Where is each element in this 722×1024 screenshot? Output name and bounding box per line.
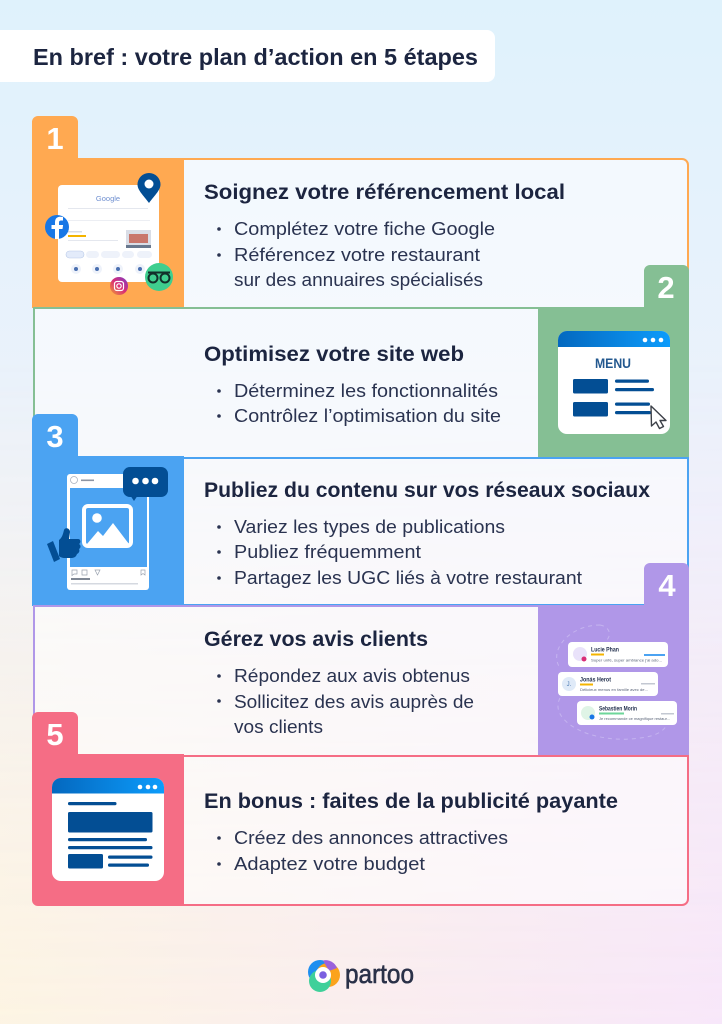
review: Jonas Herot: Délicieux menus en famille avec de... xyxy=(580,687,648,692)
bullet list 5: Créez des annonces attractives xyxy=(234,827,508,848)
heading 5: En bonus : faites de la publicité payante xyxy=(204,790,618,813)
bullet list 4: Sollicitez des avis auprès de xyxy=(234,691,474,712)
review: Sebastien Morin xyxy=(577,701,677,725)
icon: social post with like and comment xyxy=(47,467,168,590)
review: Sebastien Morin: Je recommande ce magnifique restaur... xyxy=(599,716,670,721)
icon: Google business listing with social badges: Google xyxy=(96,194,120,203)
title banner: En bref : votre plan d’action en 5 étapes xyxy=(33,44,478,70)
number 4: 4 xyxy=(658,568,676,603)
panel: step 3 social networks xyxy=(32,414,688,606)
number 2: 2 xyxy=(657,270,675,305)
icon: advertising browser window xyxy=(52,778,164,881)
bullet list 1 xyxy=(217,218,495,290)
logo mark xyxy=(308,960,340,992)
icon: menu browser window with cursor: MENU xyxy=(595,356,631,371)
tab and colour block 2 xyxy=(538,265,689,458)
bullet list 3 xyxy=(217,516,582,588)
icon: menu browser window with cursor xyxy=(558,331,670,434)
tab and colour block 4 xyxy=(538,563,689,756)
bullet list 5 xyxy=(217,827,508,874)
bullet list 4: vos clients xyxy=(234,716,323,737)
card 4 background xyxy=(34,606,542,756)
heading 4: Gérez vos avis clients xyxy=(204,628,428,651)
bullet list 3: Variez les types de publications xyxy=(234,516,505,537)
number 3: 3 xyxy=(46,419,64,454)
bullet list 4: Répondez aux avis obtenus xyxy=(234,665,470,686)
icon: Google business listing with social badges xyxy=(45,173,173,295)
card 3 background xyxy=(180,458,688,605)
number 5: 5 xyxy=(46,717,64,752)
card 5 background xyxy=(180,756,688,905)
review: Lucie Phan xyxy=(568,642,668,667)
bullet list 3: Partagez les UGC liés à votre restaurant xyxy=(234,567,582,588)
bullet list 2 xyxy=(217,380,501,426)
panel: step 2 website xyxy=(34,265,689,458)
bullet list 3: Publiez fréquemment xyxy=(234,541,421,562)
heading 1: Soignez votre référencement local xyxy=(204,181,565,204)
logo: Partoo xyxy=(308,959,414,992)
card 2 background xyxy=(34,308,542,458)
bullet list 2: Déterminez les fonctionnalités xyxy=(234,380,498,401)
tab and colour block 1 xyxy=(32,116,184,308)
tab and colour block 5 xyxy=(32,712,184,906)
review: Lucie Phan: Lucie Phan xyxy=(591,648,619,654)
logo wordmark: partoo xyxy=(345,959,414,989)
panel: step 1 local SEO xyxy=(32,116,688,308)
card 1 background xyxy=(180,159,688,308)
number 1: 1 xyxy=(46,121,64,156)
heading 3: Publiez du contenu sur vos réseaux sociaux xyxy=(204,479,650,502)
bullet list 1: Référencez votre restaurant xyxy=(234,244,480,265)
bullet list 1: sur des annuaires spécialisés xyxy=(234,269,483,290)
review: Lucie Phan: Super unfé, super ambiance j'ai ado... xyxy=(591,658,662,662)
panel: step 4 customer reviews xyxy=(34,563,689,756)
bullet list 2: Contrôlez l’optimisation du site xyxy=(234,405,501,426)
bullet list 5: Adaptez votre budget xyxy=(234,853,425,874)
bullet list 1: Complétez votre fiche Google xyxy=(234,218,495,239)
review: Jonas Herot: Jonás Herot xyxy=(580,678,611,684)
review: Jonas Herot: J. xyxy=(567,682,572,688)
icon: review cards xyxy=(557,625,677,739)
review: Jonas Herot xyxy=(558,672,658,696)
panel: step 5 paid advertising xyxy=(32,712,688,906)
tab and colour block 3 xyxy=(32,414,184,606)
title banner xyxy=(0,30,495,82)
bullet list 4 xyxy=(217,665,474,737)
heading 2: Optimisez votre site web xyxy=(204,343,464,366)
review: Sebastien Morin: Sebastien Morin xyxy=(599,706,637,712)
